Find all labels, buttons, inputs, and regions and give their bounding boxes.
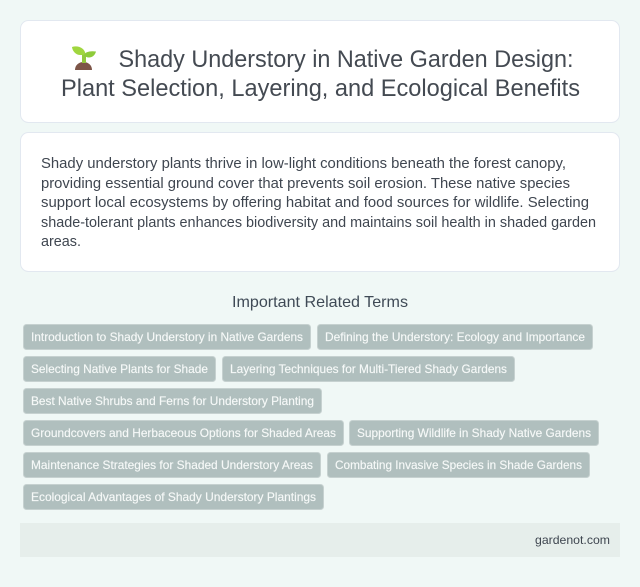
footer — [20, 523, 620, 557]
text block: introduction: shade-tolerant plants enhances biodiversity and maintains soil health in shaded garden — [41, 215, 596, 231]
tag list — [24, 324, 598, 510]
tag — [24, 452, 320, 478]
tag: Defining the Understory: Ecology and Importance — [325, 330, 585, 344]
tag: Best Native Shrubs and Ferns for Understory Planting — [31, 394, 314, 408]
tag: Combating Invasive Species in Shade Gardens — [335, 458, 582, 472]
tag — [24, 356, 216, 382]
text block: introduction — [41, 156, 596, 250]
title: Plant Selection, Layering, and Ecological Benefits — [61, 75, 580, 102]
tag: Maintenance Strategies for Shaded Understory Areas — [31, 458, 313, 472]
tag: Introduction to Shady Understory in Native Gardens — [31, 330, 303, 344]
tag — [328, 452, 590, 478]
tag: Ecological Advantages of Shady Understory Plantings — [31, 490, 316, 504]
tag: Layering Techniques for Multi-Tiered Shady Gardens — [230, 362, 507, 376]
tag: Supporting Wildlife in Shady Native Gardens — [357, 426, 591, 440]
text block: introduction: providing essential ground cover that prevents soil erosion. These native species — [41, 176, 570, 192]
tag — [24, 324, 310, 350]
tag: Groundcovers and Herbaceous Options for Shaded Areas — [31, 426, 336, 440]
text block: introduction: Shady understory plants thrive in low-light conditions beneath the forest canopy, — [41, 156, 566, 172]
tag — [318, 324, 592, 350]
text block: introduction: support local ecosystems by offering habitat and food sources for wildlife. Selecting — [41, 195, 589, 211]
title — [61, 46, 580, 102]
tag: Selecting Native Plants for Shade — [31, 362, 208, 376]
tag — [24, 388, 322, 414]
footer: gardenot.com — [535, 533, 610, 547]
title: Shady Understory in Native Garden Design: — [118, 46, 574, 73]
tag — [24, 420, 344, 446]
tag — [24, 484, 324, 510]
tag — [222, 356, 514, 382]
icon: seedling — [72, 46, 96, 70]
panel: title card — [20, 20, 620, 122]
tag — [350, 420, 598, 446]
panel: introduction text — [20, 132, 620, 272]
text block: introduction: areas. — [41, 234, 81, 250]
heading: important related terms: Important Related Terms — [232, 294, 408, 311]
